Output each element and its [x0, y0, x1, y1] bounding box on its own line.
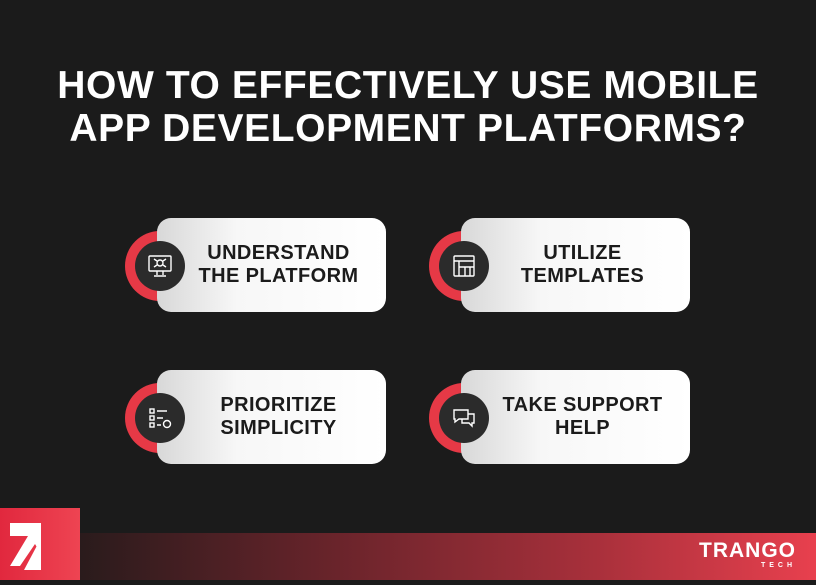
text	[502, 394, 662, 439]
text: UNDERSTAND	[207, 242, 350, 264]
title	[57, 64, 759, 150]
text: HELP	[555, 417, 610, 439]
title: APP DEVELOPMENT PLATFORMS?	[69, 107, 747, 150]
logo text: TRANGO	[699, 539, 796, 562]
text	[220, 394, 337, 439]
card: understand the platform	[125, 218, 386, 312]
footer bar	[80, 533, 816, 580]
text: UTILIZE	[543, 242, 622, 264]
card: utilize templates	[429, 218, 690, 312]
text	[198, 242, 358, 287]
text: SIMPLICITY	[220, 417, 337, 439]
icon: monitor	[135, 241, 185, 291]
icon: checklist gear	[135, 393, 185, 443]
card: take support help	[429, 370, 690, 464]
text: TAKE SUPPORT	[502, 394, 662, 416]
icon: template	[439, 241, 489, 291]
text: THE PLATFORM	[199, 265, 358, 287]
logo mark	[0, 508, 80, 580]
text: TEMPLATES	[521, 265, 644, 287]
text: PRIORITIZE	[220, 394, 337, 416]
icon: chat	[439, 393, 489, 443]
text	[521, 242, 644, 287]
logo text: TECH	[761, 562, 796, 569]
title: HOW TO EFFECTIVELY USE MOBILE	[57, 64, 759, 107]
card: prioritize simplicity	[125, 370, 386, 464]
